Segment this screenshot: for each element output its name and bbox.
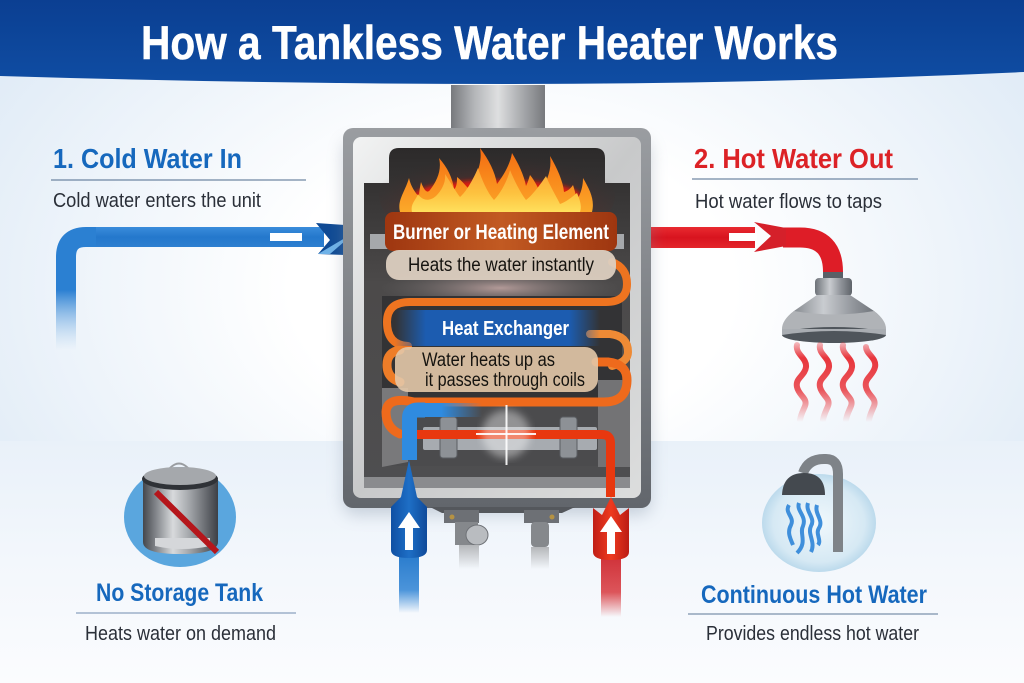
heat exchanger label: Heat Exchanger: [442, 318, 569, 340]
gas valve right: [524, 510, 559, 569]
heading: continuous hot water: Continuous Hot Water: [701, 581, 927, 609]
coils text pill: Water heats up as: [422, 350, 555, 371]
heat exchanger label: [395, 310, 600, 346]
heading: cold water in: 1. Cold Water In: [53, 143, 242, 174]
cold water inlet pipe: [56, 223, 345, 350]
cold supply pipe: [399, 555, 419, 613]
icon: crossed-out tank: [124, 464, 236, 567]
inner panel: [353, 137, 641, 498]
panel: hot water out: [692, 143, 918, 213]
gas valve left: [444, 510, 488, 569]
coil tubes: [386, 262, 628, 434]
burner flames: [399, 148, 593, 212]
spark highlight: [476, 405, 536, 465]
burner label: Burner or Heating Element: [393, 221, 609, 244]
icon: shower with water: [762, 459, 876, 572]
outer case: [343, 128, 651, 508]
header banner: [0, 0, 1024, 84]
hot water waves: [797, 345, 875, 420]
flame glow: [379, 140, 615, 250]
shower head: [782, 272, 886, 343]
bottom connections: [391, 460, 629, 617]
heats text pill: Heats the water instantly: [408, 255, 594, 276]
hot water outlet pipe and shower head: [650, 222, 886, 420]
hot fitting: [593, 497, 629, 560]
horizontal burner tube: [370, 234, 624, 249]
unit shadow: [343, 140, 651, 515]
valve manifold: [423, 417, 597, 458]
hot water internal pipe: [417, 434, 610, 497]
cold water internal pipe: [410, 403, 482, 460]
burner label: [385, 212, 617, 251]
water heater unit: [343, 128, 651, 515]
panel: cold water in: [51, 143, 306, 212]
heats text pill: [386, 250, 616, 280]
text: endless hot water: Provides endless hot water: [706, 623, 919, 645]
heading: no storage tank: No Storage Tank: [96, 579, 263, 607]
coils text pill: it passes through coils: [425, 370, 585, 391]
heading: hot water out: 2. Hot Water Out: [694, 143, 893, 174]
text: cold water description: Cold water enters the unit: [53, 190, 261, 212]
text: hot water description: Hot water flows to taps: [695, 191, 882, 213]
text: on demand: Heats water on demand: [85, 623, 276, 645]
coils text pill: [395, 347, 598, 392]
dark chamber: [364, 148, 630, 488]
title: How a Tankless Water Heater Works: [141, 16, 838, 69]
panel: continuous hot water: [688, 459, 938, 645]
exhaust flue: [451, 85, 545, 129]
panel: no storage tank: [76, 464, 296, 645]
cold fitting: [391, 460, 427, 558]
hot supply pipe: [601, 555, 621, 617]
